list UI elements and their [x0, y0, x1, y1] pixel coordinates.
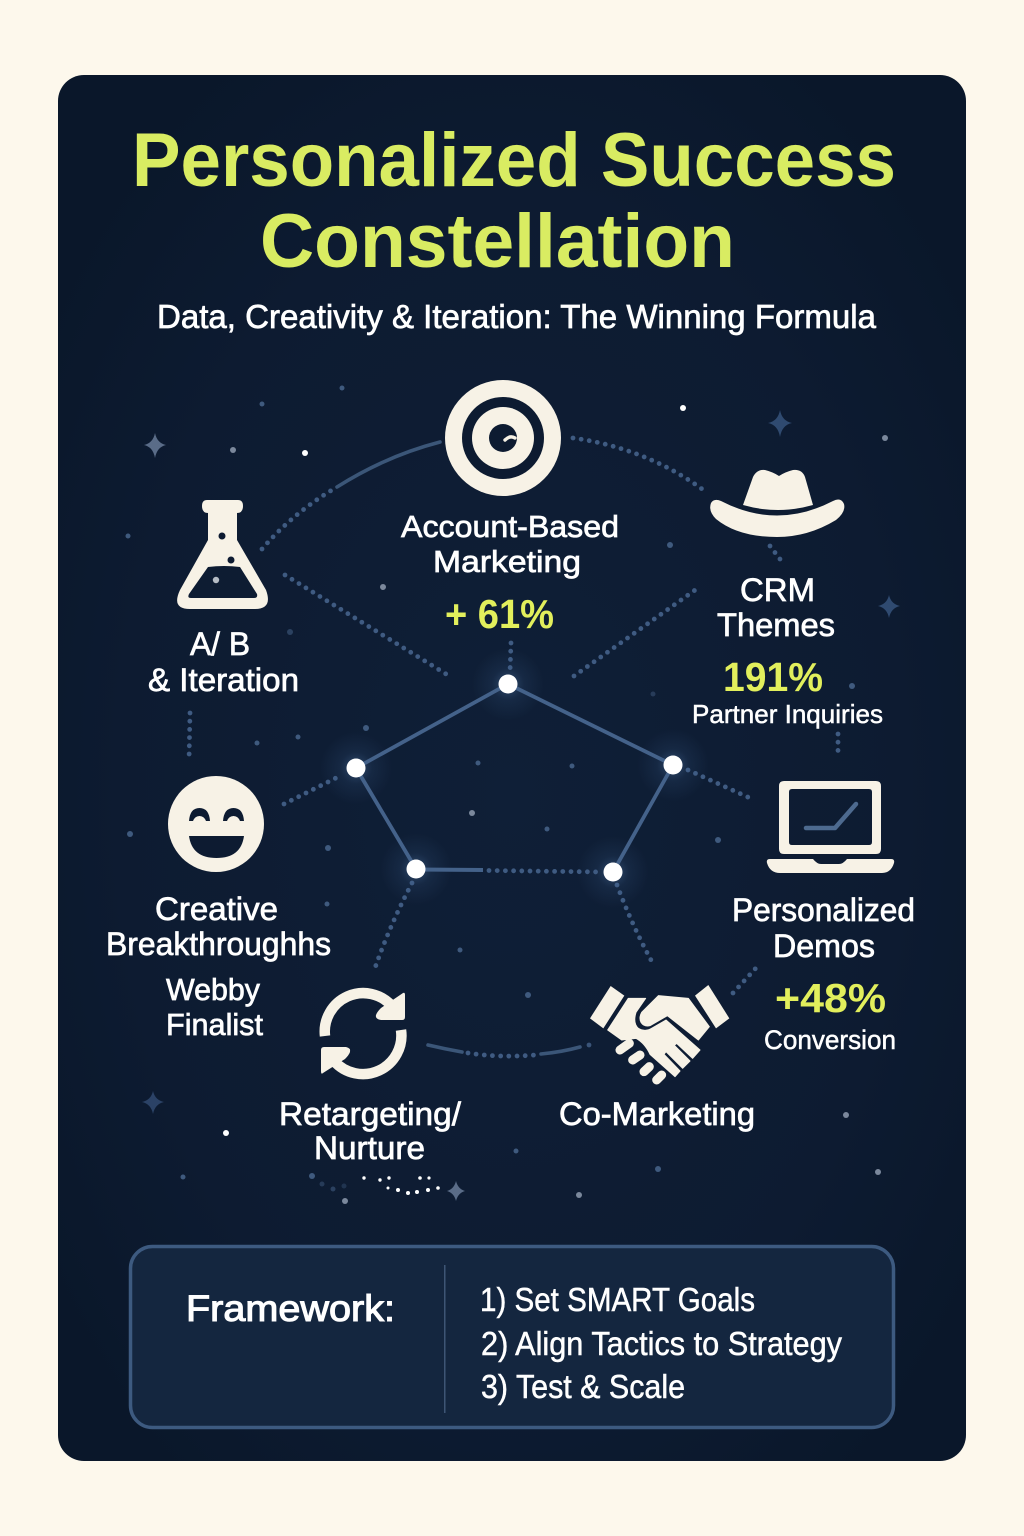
- node: co-marketing: [559, 985, 755, 1132]
- label: account-based marketing: Account-Based: [401, 509, 619, 544]
- framework steps: 1) Set SMART Goals: [480, 1281, 755, 1318]
- stat: +48%: +48%: [775, 975, 886, 1021]
- label: personalized demos: Demos: [773, 928, 875, 964]
- label: crm themes: [717, 572, 835, 643]
- label: personalized demos: [732, 892, 915, 964]
- label: crm themes: Themes: [717, 607, 835, 643]
- label: account-based marketing: Marketing: [433, 544, 581, 579]
- label: crm themes: CRM: [740, 572, 815, 608]
- caption: partner inquiries: Partner Inquiries: [692, 699, 883, 729]
- framework heading: Framework:: [186, 1288, 395, 1329]
- connecting arcs between tactics: [189, 438, 838, 1056]
- label: creative breakthroughhs: Breakthroughhs: [106, 926, 331, 962]
- icon: laptop: [767, 781, 894, 873]
- label: co-marketing: Co-Marketing: [559, 1096, 755, 1132]
- framework steps: [480, 1281, 842, 1405]
- icon: flask: [177, 500, 268, 609]
- icon: target: [445, 380, 561, 496]
- node: retargeting: [279, 993, 461, 1166]
- title: Personalized Success: [132, 118, 896, 203]
- title: Constellation: [260, 199, 735, 284]
- label: a/b iteration: A/ B: [190, 626, 250, 662]
- label: account-based marketing: [401, 509, 619, 579]
- central pentagon constellation: [320, 648, 709, 908]
- label: retargeting nurture: Retargeting/: [279, 1096, 461, 1132]
- panel box: [130, 1246, 894, 1428]
- sparkle stars: [142, 410, 900, 1201]
- node: account-based marketing: [401, 380, 619, 637]
- icon: hat: [710, 470, 844, 537]
- stat: 191%: 191%: [723, 654, 823, 700]
- framework steps: 3) Test & Scale: [481, 1368, 685, 1405]
- icon: refresh arrows: [321, 993, 405, 1074]
- caption: conversion: Conversion: [764, 1025, 896, 1055]
- node: personalized demos: [732, 781, 915, 1055]
- divider: [444, 1265, 446, 1413]
- panel: framework: [130, 1246, 894, 1428]
- star field: [126, 386, 900, 1204]
- label: a/b iteration: [148, 626, 299, 698]
- node: crm themes: [692, 470, 883, 729]
- label: creative breakthroughhs: Creative: [155, 891, 278, 927]
- caption: webby finalist: [166, 972, 263, 1042]
- label: retargeting nurture: Nurture: [314, 1130, 425, 1166]
- label: a/b iteration: & Iteration: [148, 662, 299, 698]
- stat: +61%: + 61%: [445, 591, 554, 637]
- title: [132, 118, 896, 284]
- icon: smiley: [168, 776, 264, 872]
- node: a/b iteration: [148, 500, 299, 698]
- label: personalized demos: Personalized: [732, 892, 915, 928]
- node: creative breakthroughs: [106, 776, 331, 1042]
- label: creative breakthroughhs: [106, 891, 331, 962]
- caption: webby finalist: Finalist: [166, 1007, 263, 1042]
- label: retargeting nurture: [279, 1096, 461, 1166]
- framework steps: 2) Align Tactics to Strategy: [481, 1325, 842, 1362]
- icon: handshake: [590, 985, 729, 1080]
- caption: webby finalist: Webby: [166, 972, 260, 1007]
- subtitle: Data, Creativity & Iteration: The Winning Formula: [157, 298, 877, 335]
